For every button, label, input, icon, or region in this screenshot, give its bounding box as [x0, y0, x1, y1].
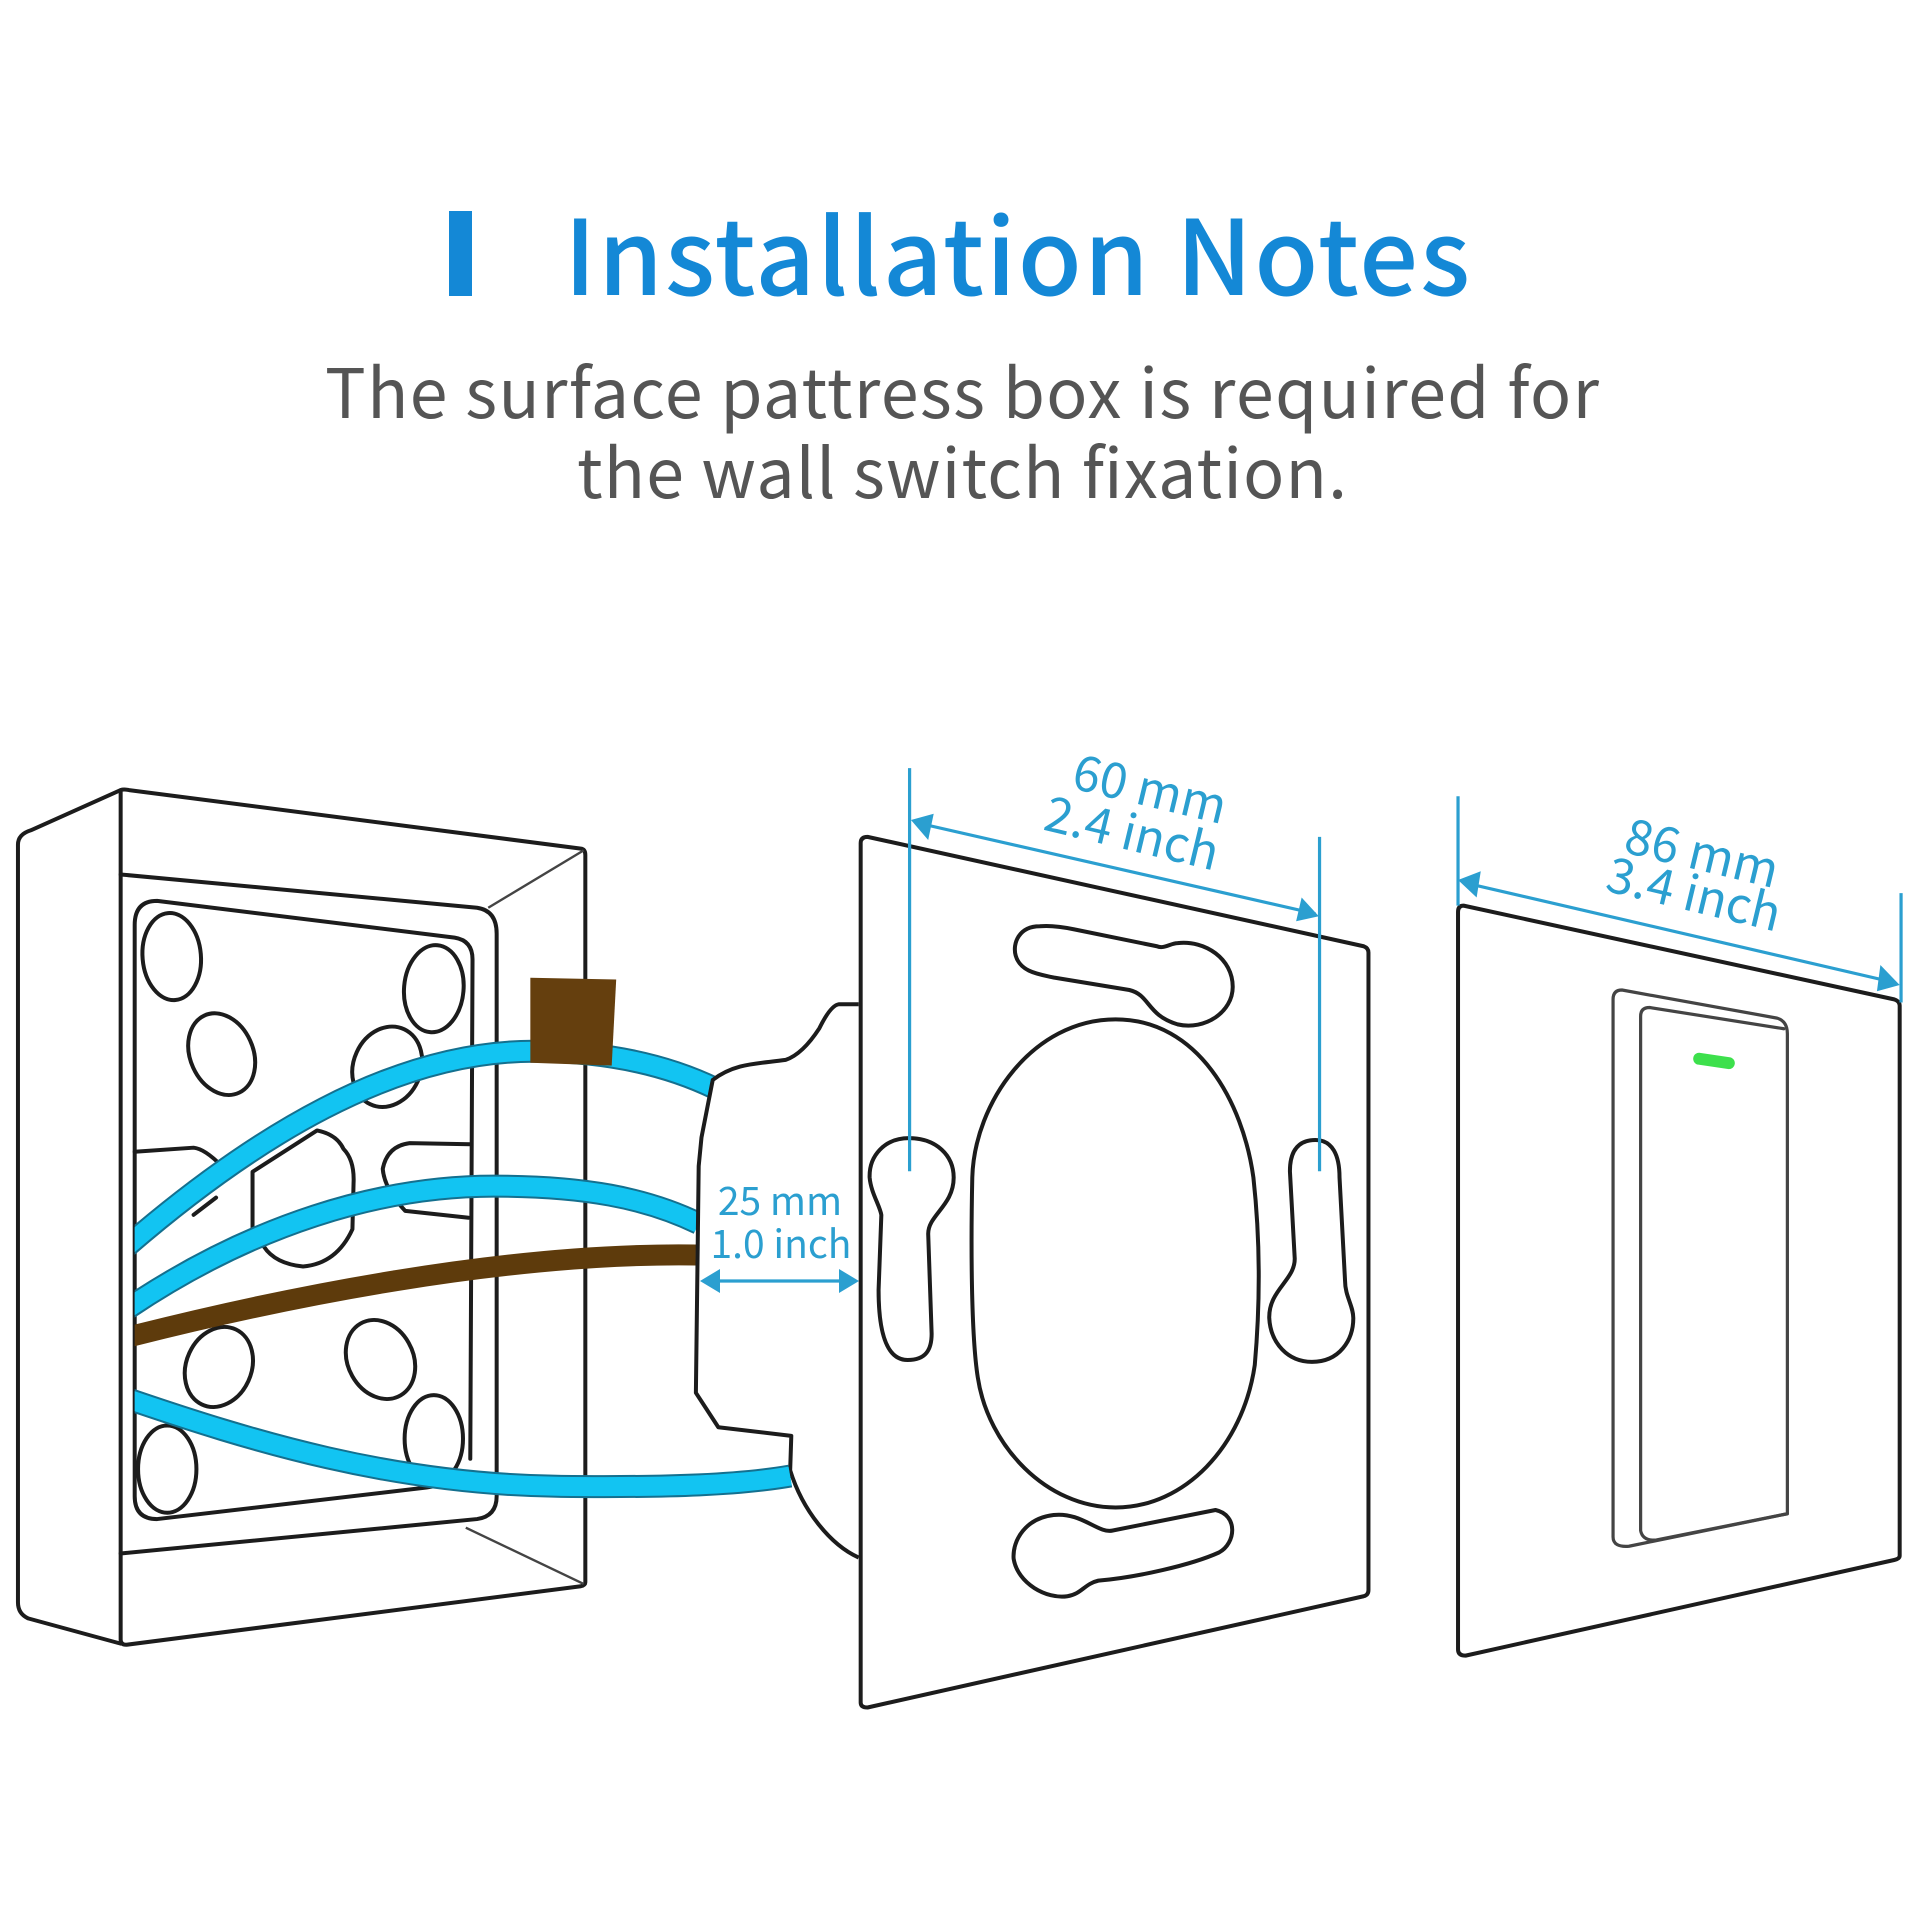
mounting plate and switch panels [861, 768, 1901, 1708]
mounting plate [861, 837, 1368, 1708]
60 mm label: 2.4 inch [1038, 775, 1227, 885]
box inner recess with knockouts [135, 901, 473, 1519]
brown wire clip [530, 978, 616, 1066]
box outer shell [18, 790, 585, 1645]
subtitle: The surface pattress box is required for [325, 339, 1600, 438]
subtitle: the wall switch fixation. [577, 419, 1347, 518]
60 mm label [1038, 733, 1235, 885]
60 mm dimension lines [910, 768, 1320, 1171]
switch back plate [1613, 990, 1787, 1546]
switch rocker [1641, 1008, 1787, 1540]
86 mm label: 86 mm [1619, 797, 1787, 903]
60 mm label: 60 mm [1067, 733, 1235, 839]
86 mm label: 3.4 inch [1600, 836, 1789, 946]
pattress box with wires [18, 790, 859, 1645]
title: Installation Notes [564, 174, 1470, 325]
title accent bar [449, 211, 472, 296]
green LED [1699, 1059, 1729, 1063]
switch panel [1458, 906, 1900, 1656]
adapter body [696, 1004, 859, 1558]
brown wire [123, 1255, 696, 1338]
depth label 25 mm: 1.0 inch [711, 1214, 851, 1270]
blue wire 2 [123, 1186, 699, 1311]
blue wire 3 [123, 1397, 790, 1487]
86 mm dimension lines [1458, 796, 1901, 1002]
blue wire 1 [123, 1051, 716, 1249]
depth arrow [700, 1269, 859, 1293]
depth label 25 mm: 25 mm [718, 1171, 842, 1227]
subtitle [325, 339, 1600, 518]
depth label 25 mm [711, 1171, 851, 1270]
